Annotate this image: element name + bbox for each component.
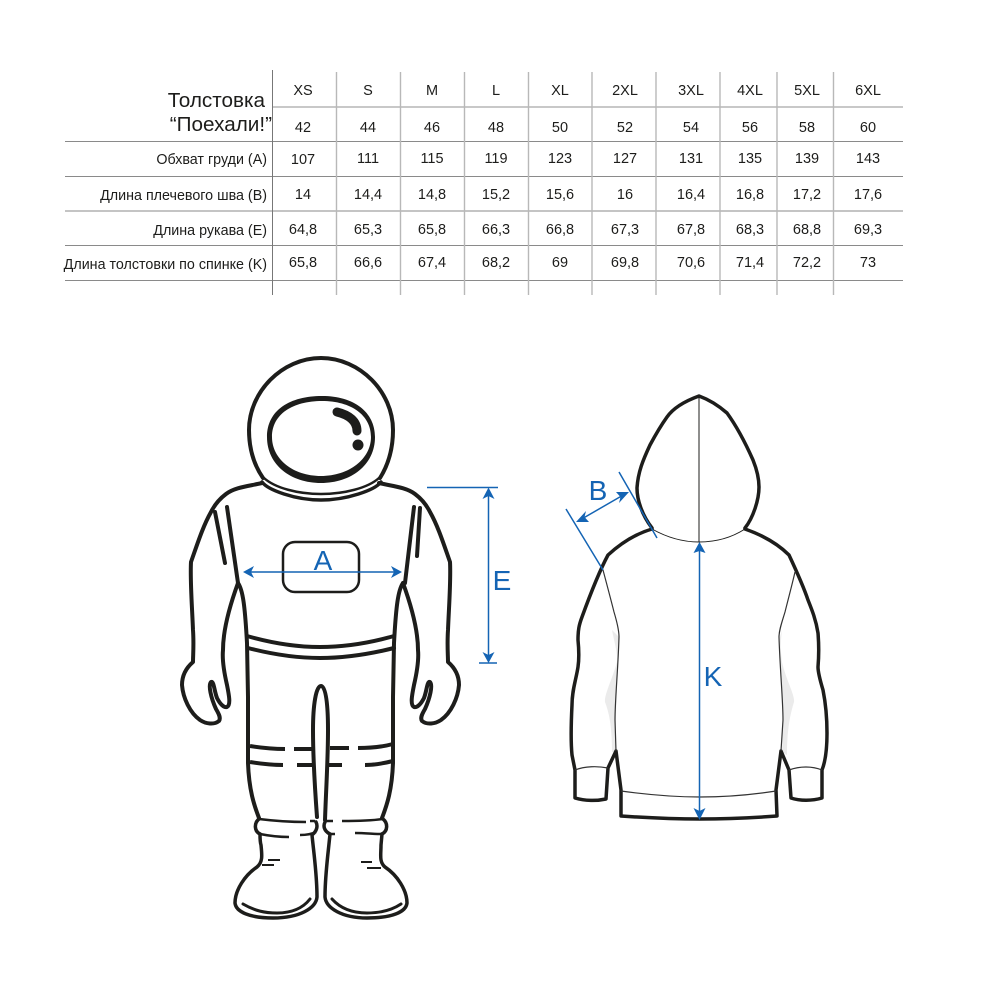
row: sleeve length: 66,3 bbox=[482, 222, 510, 238]
row: shoulder seam length: 14,4 bbox=[354, 187, 382, 203]
row: clothing sizes bbox=[293, 83, 881, 99]
row: clothing sizes: S bbox=[363, 83, 373, 99]
row: numeric sizes: 48 bbox=[488, 120, 504, 136]
row: shoulder seam length bbox=[100, 187, 882, 204]
row: shoulder seam length: 17,2 bbox=[793, 187, 821, 203]
row: shoulder seam length: 17,6 bbox=[854, 187, 882, 203]
row: shoulder seam length: 14 bbox=[295, 187, 311, 203]
row: sleeve length: 67,3 bbox=[611, 222, 639, 238]
table title: “Поехали!” bbox=[170, 113, 272, 136]
hood bbox=[637, 396, 759, 528]
row: chest girth: 143 bbox=[856, 151, 880, 167]
row: back length bbox=[64, 255, 876, 273]
measure E: sleeve length bbox=[427, 488, 511, 663]
row: chest girth: 107 bbox=[291, 152, 315, 168]
row: sleeve length: 65,3 bbox=[354, 222, 382, 238]
row: shoulder seam length: 16 bbox=[617, 187, 633, 203]
legs bbox=[250, 686, 393, 820]
row: chest girth bbox=[156, 151, 880, 168]
body outline bbox=[571, 529, 827, 819]
helmet bbox=[249, 358, 393, 483]
row: numeric sizes: 60 bbox=[860, 120, 876, 136]
row: clothing sizes: 5XL bbox=[794, 83, 820, 99]
row: sleeve length: Длина рукава (Е) bbox=[153, 223, 267, 239]
row: sleeve length: 66,8 bbox=[546, 222, 574, 238]
row: back length: 70,6 bbox=[677, 255, 705, 271]
row: shoulder seam length: 15,2 bbox=[482, 187, 510, 203]
measure A: chest girth bbox=[243, 545, 402, 578]
row: numeric sizes: 46 bbox=[424, 120, 440, 136]
row: clothing sizes: L bbox=[492, 83, 500, 99]
row: back length: 67,4 bbox=[418, 255, 446, 271]
measure B: shoulder seam: B bbox=[589, 475, 607, 506]
row: back length: Длина толстовки по спинке (K) bbox=[64, 257, 267, 273]
row: chest girth: 139 bbox=[795, 151, 819, 167]
row: clothing sizes: XS bbox=[293, 83, 313, 99]
seams and cuffs bbox=[575, 570, 822, 797]
row: clothing sizes: 2XL bbox=[612, 83, 638, 99]
row: sleeve length: 64,8 bbox=[289, 222, 317, 238]
waistband bbox=[247, 636, 394, 658]
row: chest girth: 119 bbox=[484, 151, 508, 167]
row: sleeve length: 69,3 bbox=[854, 222, 882, 238]
row: numeric sizes: 54 bbox=[683, 120, 699, 136]
row: shoulder seam length: 16,4 bbox=[677, 187, 705, 203]
row: chest girth: 131 bbox=[679, 151, 703, 167]
row: shoulder seam length: 15,6 bbox=[546, 187, 574, 203]
row: numeric sizes: 42 bbox=[295, 120, 311, 136]
hoodie back figure bbox=[571, 396, 827, 819]
row: chest girth: 127 bbox=[613, 151, 637, 167]
boots bbox=[235, 819, 407, 918]
row: clothing sizes: M bbox=[426, 83, 438, 99]
row: sleeve length: 65,8 bbox=[418, 222, 446, 238]
row: back length: 65,8 bbox=[289, 255, 317, 271]
row: shoulder seam length: Длина плечевого шва (В) bbox=[100, 188, 267, 204]
size table bbox=[64, 70, 903, 295]
astronaut front figure bbox=[182, 358, 459, 918]
row: numeric sizes: 58 bbox=[799, 120, 815, 136]
table title bbox=[168, 89, 272, 136]
row: back length: 66,6 bbox=[354, 255, 382, 271]
row: back length: 68,2 bbox=[482, 255, 510, 271]
row: back length: 69,8 bbox=[611, 255, 639, 271]
row: clothing sizes: 4XL bbox=[737, 83, 763, 99]
measure B: shoulder seam bbox=[566, 472, 657, 570]
row: numeric sizes: 44 bbox=[360, 120, 376, 136]
row: chest girth: 135 bbox=[738, 151, 762, 167]
row: back length: 72,2 bbox=[793, 255, 821, 271]
row: back length: 73 bbox=[860, 255, 876, 271]
measure K: back length bbox=[694, 542, 723, 820]
row: sleeve length: 67,8 bbox=[677, 222, 705, 238]
row: back length: 69 bbox=[552, 255, 568, 271]
sleeve shading bbox=[605, 630, 794, 755]
row: shoulder seam length: 14,8 bbox=[418, 187, 446, 203]
measure E: sleeve length: E bbox=[493, 565, 511, 596]
table title: Толстовка bbox=[168, 89, 265, 112]
measure K: back length: K bbox=[704, 661, 723, 692]
row: shoulder seam length: 16,8 bbox=[736, 187, 764, 203]
row: sleeve length: 68,8 bbox=[793, 222, 821, 238]
row: chest girth: Обхват груди (А) bbox=[156, 152, 267, 168]
row: clothing sizes: XL bbox=[551, 83, 569, 99]
chest patch bbox=[283, 542, 359, 592]
row: back length: 71,4 bbox=[736, 255, 764, 271]
row: chest girth: 123 bbox=[548, 151, 572, 167]
measure A: chest girth: A bbox=[314, 545, 333, 576]
row: numeric sizes: 56 bbox=[742, 120, 758, 136]
row: numeric sizes bbox=[295, 120, 876, 136]
row: numeric sizes: 50 bbox=[552, 120, 568, 136]
row: numeric sizes: 52 bbox=[617, 120, 633, 136]
suit outline bbox=[182, 483, 459, 818]
row: sleeve length: 68,3 bbox=[736, 222, 764, 238]
row: chest girth: 111 bbox=[357, 151, 379, 167]
row: chest girth: 115 bbox=[420, 151, 444, 167]
row: sleeve length bbox=[153, 222, 882, 239]
neckline bbox=[652, 529, 745, 542]
row: clothing sizes: 3XL bbox=[678, 83, 704, 99]
collar bbox=[262, 478, 381, 500]
hood centre seam bbox=[698, 396, 700, 542]
row: clothing sizes: 6XL bbox=[855, 83, 881, 99]
